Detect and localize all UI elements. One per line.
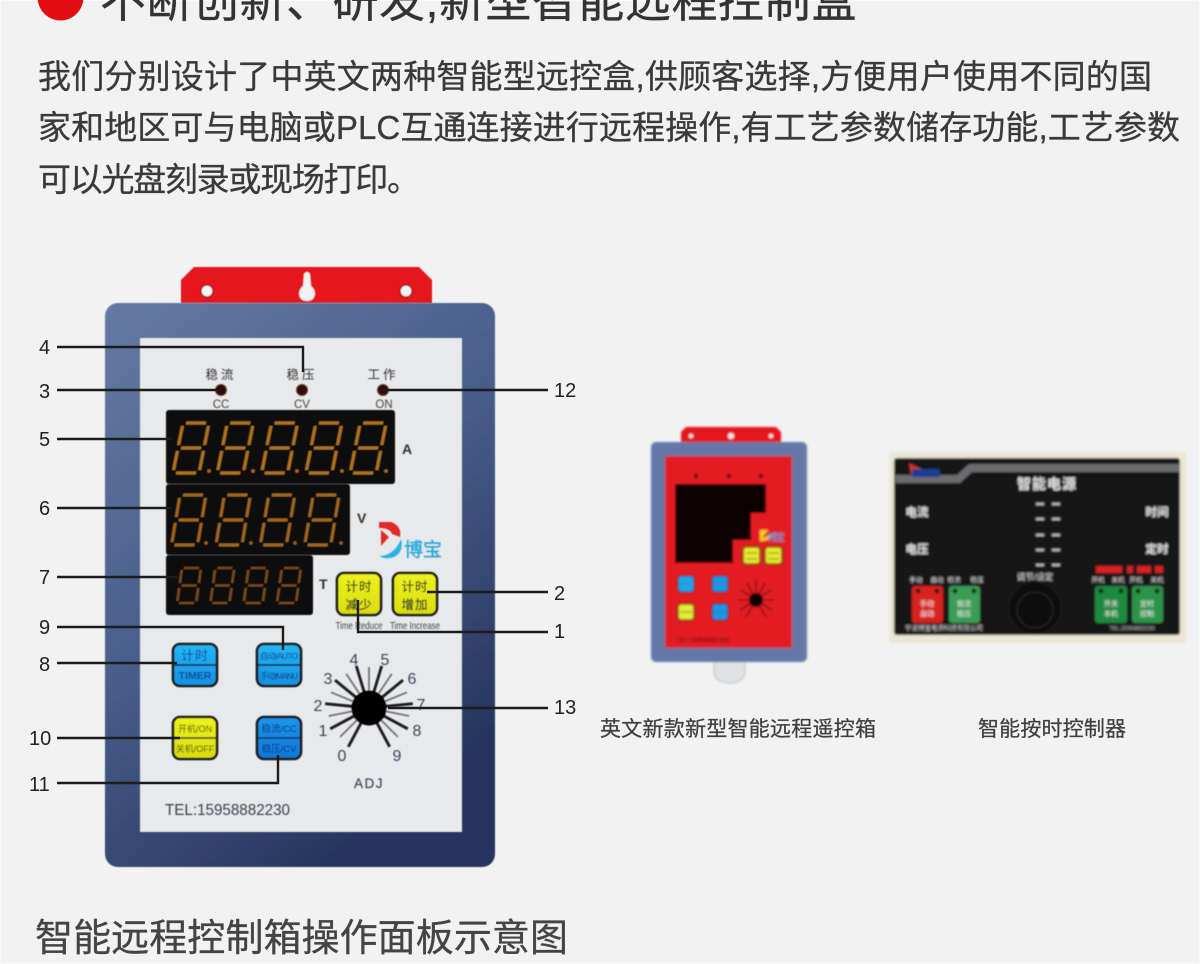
- cable gland: [714, 662, 745, 683]
- button: time increase: [390, 573, 440, 632]
- button: auto / manual: 手动/MANU: [260, 671, 298, 681]
- buttons: [678, 547, 782, 620]
- dial: ADJ knob: 2: [314, 698, 323, 715]
- dial: ADJ knob: 7: [417, 697, 426, 714]
- dial: ADJ knob: 1: [319, 723, 328, 740]
- unit labels: A: [402, 441, 412, 457]
- text block: description: 家和地区可与电脑或PLC互通连接进行远程操作,有工艺参数储存功能,工艺参数: [38, 109, 1180, 146]
- panel: English remote box photo: [651, 427, 807, 683]
- small button labels: 关机: [1150, 575, 1164, 584]
- leader lines and numbers: 3: [39, 381, 50, 403]
- leader lines and numbers: 4: [39, 337, 50, 359]
- panel: timer controller photo: 调节/设定: [1017, 572, 1054, 582]
- outer cream frame: [889, 452, 1186, 643]
- dial: ADJ knob: 6: [408, 671, 417, 688]
- small button labels: 手动: [910, 575, 923, 584]
- dial: ADJ knob: 8: [413, 723, 422, 740]
- black face: [894, 458, 1180, 635]
- text block: description: 可以光盘刻录或现场打印。: [38, 161, 420, 198]
- button: time reduce: 减少: [345, 598, 373, 612]
- small button labels: 开机: [1092, 575, 1105, 584]
- small button labels: 开机: [1130, 575, 1143, 584]
- device frame: [105, 303, 495, 867]
- phone number: TEL:15958882230: [165, 802, 290, 819]
- panel: timer controller photo: 稳压: [957, 609, 971, 618]
- panel: English remote box photo: 博宝: [767, 531, 785, 544]
- knob: [1010, 583, 1060, 633]
- button: CC / CV: 稳压/CV: [262, 743, 297, 755]
- button: timer: TIMER: [179, 670, 212, 682]
- dial: ADJ knob: ADJ: [354, 776, 384, 791]
- indicator lights: [205, 367, 399, 411]
- button: auto / manual: [257, 644, 301, 686]
- panel: timer controller photo: 电压: [906, 542, 929, 556]
- labels: 智能电源: [1017, 476, 1077, 492]
- button: timer: [173, 644, 217, 686]
- timer display T: [166, 555, 313, 615]
- indicator lights: CC: [213, 399, 229, 411]
- panel: timer controller photo: 自动: [920, 609, 934, 618]
- dial: ADJ knob: 0: [338, 748, 347, 765]
- unit labels: T: [319, 576, 328, 592]
- unit labels: V: [357, 510, 367, 526]
- button: time increase: 计时: [401, 580, 429, 594]
- dial: ADJ knob: 3: [324, 671, 333, 688]
- text block: description: [38, 58, 1180, 198]
- frame: [651, 442, 807, 662]
- leader lines and numbers: 5: [39, 429, 50, 451]
- small button labels: 关机: [1112, 575, 1125, 584]
- small button labels: [910, 575, 1164, 584]
- leader lines and numbers: 8: [39, 654, 50, 676]
- button: power on / off: 开机/ON: [178, 723, 212, 734]
- button: time reduce: [336, 573, 383, 632]
- icon: red heading bullet: [38, 0, 84, 20]
- panel: timer controller photo: 控制: [1140, 609, 1154, 618]
- button: auto / manual: 自动/AUTO: [260, 651, 298, 661]
- leader lines and numbers: 2: [554, 583, 565, 605]
- indicator lights: 稳流: [205, 367, 237, 382]
- caption: English box: 英文新款新型智能远程遥控箱: [600, 718, 876, 741]
- bracket: [681, 427, 781, 442]
- panel: timer controller photo: [889, 452, 1186, 643]
- leader lines and numbers: 11: [29, 774, 50, 796]
- panel: timer controller photo: 本机: [1104, 609, 1118, 618]
- leader lines and numbers: [29, 337, 576, 796]
- caption: panel diagram: 智能远程控制箱操作面板示意图: [35, 918, 568, 960]
- dial: ADJ knob: [314, 652, 426, 791]
- button: CC / CV: 稳流/CC: [261, 723, 297, 735]
- indicator lights: ON: [375, 399, 393, 411]
- unit labels: [319, 441, 412, 592]
- buttons: [912, 586, 943, 623]
- footer text: 宁波博宝电源科技有限公司: [905, 623, 983, 632]
- black display: [675, 484, 766, 563]
- face plate: [140, 338, 462, 832]
- current display A: [166, 410, 395, 484]
- panel: timer controller photo: 开关: [1104, 599, 1118, 608]
- panel: main control box diagram: [29, 267, 576, 867]
- icon: brand logo: [379, 522, 442, 561]
- leader lines and numbers: 10: [29, 728, 51, 750]
- button: time reduce: 计时: [345, 580, 373, 594]
- caption: timer controller: 智能按时控制器: [978, 718, 1126, 741]
- panel: timer controller photo: 定时: [1146, 542, 1169, 556]
- indicator lights: 工作: [367, 368, 399, 382]
- button: power on / off: [173, 717, 217, 759]
- icon: red mounting bracket: [181, 267, 432, 303]
- leader lines and numbers: 6: [39, 498, 50, 520]
- panel: English remote box photo: TEL:15958882230: [676, 637, 730, 644]
- panel: timer controller photo: TEL:15958882230: [1109, 626, 1155, 632]
- small button labels: 自动: [930, 575, 944, 584]
- leader lines and numbers: 1: [554, 621, 565, 643]
- dial: [738, 580, 774, 617]
- lights: [694, 474, 698, 478]
- grey band: [895, 464, 1180, 483]
- button: time increase: 增加: [401, 597, 429, 612]
- indicator lights: 稳压: [286, 367, 318, 382]
- panel: timer controller photo: 电流: [906, 505, 929, 519]
- dial: ADJ knob: 9: [393, 748, 402, 765]
- small button labels: 稳压: [970, 575, 984, 584]
- panel: timer controller photo: 手动: [920, 599, 934, 608]
- button: time increase: Time Increase: [390, 620, 440, 632]
- indicator lights: CV: [294, 399, 310, 411]
- icon: brand logo: 博宝: [404, 539, 442, 561]
- dial: ADJ knob: 4: [350, 652, 359, 669]
- leader lines and numbers: 7: [39, 567, 50, 589]
- button: time reduce: Time Reduce: [336, 620, 383, 632]
- red face: [665, 456, 792, 648]
- panel: timer controller photo: 稳流: [957, 599, 971, 608]
- text block: description: 我们分别设计了中英文两种智能型远控盒,供顾客选择,方便用户使用不同的国: [38, 58, 1152, 95]
- dial: ADJ knob: 5: [381, 652, 390, 669]
- small button labels: 稳流: [948, 575, 961, 584]
- button: timer: 计时: [181, 648, 209, 663]
- leader lines and numbers: 12: [554, 380, 576, 402]
- logo: [760, 530, 772, 541]
- panel: timer controller photo: 定时: [1140, 599, 1154, 608]
- leader lines and numbers: 9: [39, 617, 50, 639]
- leader lines and numbers: 13: [554, 697, 576, 719]
- logo: [909, 463, 924, 474]
- voltage display V: [166, 484, 350, 555]
- panel: timer controller photo: 时间: [1146, 505, 1168, 519]
- button: power on / off: 关机/OFF: [176, 743, 215, 754]
- button: CC / CV: [257, 717, 301, 759]
